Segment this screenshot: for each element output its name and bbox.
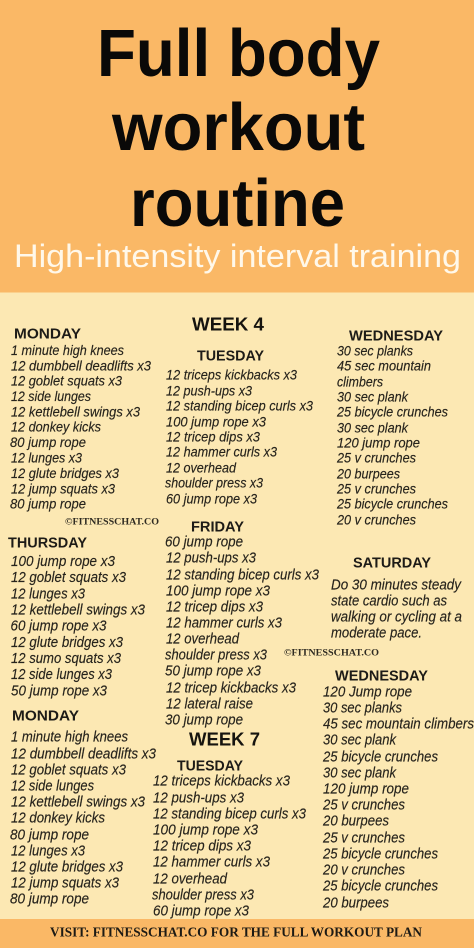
list: Tuesday week 7 exercises: 12 overhead — [153, 872, 228, 888]
heading: Friday: FRIDAY — [191, 520, 244, 536]
list: Wednesday week 7 exercises: 30 sec plank — [323, 732, 397, 748]
heading: Wednesday: WEDNESDAY — [349, 328, 443, 344]
text block: Saturday cardio: moderate pace. — [331, 626, 422, 642]
heading: Tuesday week 7: TUESDAY — [177, 758, 243, 774]
list: Monday exercises: 12 glute bridges x3 — [11, 466, 119, 481]
list: Wednesday week 7 exercises: 25 v crunches — [322, 798, 405, 814]
list: Friday exercises: 12 tricep dips x3 — [166, 600, 263, 616]
heading: Week 4: WEEK 4 — [192, 314, 264, 334]
list: Thursday exercises — [10, 554, 145, 700]
list: Tuesday week 7 exercises: 100 jump rope x3 — [153, 822, 258, 838]
list: Wednesday exercises: 25 v crunches — [336, 482, 416, 496]
list: Wednesday week 7 exercises: 20 burpees — [322, 814, 389, 830]
list: Monday week 7 exercises: 80 jump rope — [10, 892, 89, 908]
list: Tuesday week 7 exercises: 12 push-ups x3 — [153, 790, 244, 806]
list: Monday week 7 exercises: 12 kettlebell swings x3 — [11, 794, 145, 810]
title: workout — [111, 90, 365, 165]
list: Monday exercises: 12 dumbbell deadlifts x3 — [11, 358, 151, 374]
list: Friday exercises: 100 jump rope x3 — [166, 584, 270, 600]
list: Wednesday week 7 exercises: 25 v crunches — [322, 830, 405, 846]
list: Thursday exercises: 12 kettlebell swings x3 — [11, 602, 145, 618]
list: Wednesday week 7 exercises: 25 bicycle crunches — [322, 750, 438, 766]
heading: Wednesday week 7: WEDNESDAY — [335, 668, 428, 684]
list: Friday exercises: 50 jump rope x3 — [165, 664, 261, 680]
list: Thursday exercises: 12 lunges x3 — [11, 586, 85, 602]
list: Thursday exercises: 60 jump rope x3 — [10, 618, 106, 634]
text block: Saturday cardio — [331, 578, 462, 642]
list: Wednesday week 7 exercises — [322, 684, 474, 912]
list: Wednesday exercises: 45 sec mountain — [337, 358, 431, 374]
list: Wednesday exercises: 120 jump rope — [337, 436, 420, 450]
heading: Week 7: WEEK 7 — [189, 730, 260, 750]
list: Monday exercises — [10, 343, 151, 512]
watermark: ©FITNESSCHAT.CO — [284, 648, 379, 658]
list: Tuesday week 7 exercises — [152, 774, 306, 920]
list: Monday exercises: 12 donkey kicks — [11, 420, 101, 434]
footer text: VISIT: FITNESSCHAT.CO FOR THE FULL WORKOUT PLAN — [50, 924, 422, 940]
list: Thursday exercises: 12 side lunges x3 — [11, 667, 112, 683]
list: Thursday exercises: 50 jump rope x3 — [11, 684, 107, 700]
list: Tuesday week 7 exercises: 12 standing bicep curls x3 — [153, 806, 306, 822]
list: Thursday exercises: 12 glute bridges x3 — [11, 635, 123, 651]
list: Wednesday week 7 exercises: 25 bicycle crunches — [322, 846, 438, 862]
list: Monday week 7 exercises: 12 lunges x3 — [11, 844, 85, 860]
list: Friday exercises: 60 jump rope — [165, 534, 243, 550]
list: Thursday exercises: 100 jump rope x3 — [11, 554, 115, 570]
list: Tuesday week 7 exercises: 12 tricep dips x3 — [153, 838, 251, 854]
list: Wednesday week 7 exercises: 30 sec planks — [323, 700, 402, 716]
list: Monday exercises: 12 kettlebell swings x3 — [11, 404, 140, 420]
subtitle: High-intensity interval training — [14, 238, 461, 274]
list: Wednesday week 7 exercises: 20 burpees — [322, 896, 389, 912]
list: Tuesday week 7 exercises: shoulder press x3 — [152, 888, 254, 904]
list: Tuesday exercises: 12 standing bicep curls x3 — [166, 398, 313, 414]
list: Wednesday exercises: 25 bicycle crunches — [336, 496, 448, 512]
list: Monday week 7 exercises — [10, 730, 156, 908]
list: Monday week 7 exercises: 12 jump squats x3 — [11, 876, 119, 892]
list: Friday exercises: 12 lateral raise — [166, 696, 253, 712]
panel: right column — [284, 328, 474, 912]
list: Friday exercises: 12 overhead — [166, 632, 240, 648]
list: Wednesday exercises: 20 v crunches — [336, 512, 416, 528]
list: Tuesday exercises: 12 hammer curls x3 — [166, 444, 277, 460]
panel: left column — [8, 326, 159, 908]
list: Tuesday exercises: 12 push-ups x3 — [166, 384, 252, 398]
heading: Monday week 7: MONDAY — [12, 708, 79, 724]
title: routine — [130, 166, 345, 241]
list: Friday exercises — [165, 534, 319, 728]
list: Wednesday week 7 exercises: 120 Jump rope — [323, 684, 412, 700]
list: Wednesday week 7 exercises: 120 jump rope — [323, 782, 409, 798]
text block: Saturday cardio: walking or cycling at a — [331, 610, 462, 626]
list: Monday exercises: 80 jump rope — [10, 435, 86, 450]
list: Monday week 7 exercises: 80 jump rope — [10, 828, 89, 844]
heading: Monday: MONDAY — [14, 326, 81, 342]
panel: footer — [0, 919, 474, 948]
panel: middle column — [152, 314, 319, 920]
list: Monday week 7 exercises: 1 minute high knees — [11, 730, 128, 746]
list: Friday exercises: 30 jump rope — [165, 712, 243, 728]
text block: Saturday cardio: Do 30 minutes steady — [331, 578, 462, 594]
panel: header — [0, 0, 474, 292]
list: Wednesday week 7 exercises: 20 v crunches — [322, 862, 405, 878]
list: Monday week 7 exercises: 12 side lunges — [11, 778, 94, 794]
list: Monday week 7 exercises: 12 goblet squats x3 — [11, 762, 126, 778]
list: Monday week 7 exercises: 12 dumbbell deadlifts x3 — [11, 746, 156, 762]
list: Friday exercises: 12 tricep kickbacks x3 — [166, 680, 296, 696]
list: Friday exercises: shoulder press x3 — [165, 648, 267, 664]
list: Wednesday exercises: 25 v crunches — [336, 450, 416, 466]
list: Monday week 7 exercises: 12 glute bridges x3 — [11, 860, 123, 876]
list: Tuesday week 7 exercises: 60 jump rope x3 — [153, 904, 249, 920]
list: Wednesday exercises: 30 sec planks — [337, 344, 413, 358]
list: Monday week 7 exercises: 12 donkey kicks — [11, 810, 105, 826]
list: Tuesday week 7 exercises: 12 hammer curls x3 — [153, 854, 270, 870]
list: Thursday exercises: 12 goblet squats x3 — [11, 570, 126, 586]
heading: Thursday: THURSDAY — [8, 536, 87, 552]
list: Wednesday exercises: 25 bicycle crunches — [336, 404, 448, 420]
text block: Saturday cardio: state cardio such as — [331, 594, 447, 610]
list: Friday exercises: 12 push-ups x3 — [166, 550, 256, 566]
list: Wednesday week 7 exercises: 30 sec plank — [323, 766, 397, 782]
list: Wednesday week 7 exercises: 25 bicycle crunches — [322, 878, 438, 894]
list: Friday exercises: 12 standing bicep curls x3 — [166, 568, 319, 584]
list: Tuesday exercises — [165, 368, 313, 506]
heading: Tuesday: TUESDAY — [197, 348, 264, 364]
list: Friday exercises: 12 hammer curls x3 — [166, 616, 282, 632]
list: Monday exercises: 12 goblet squats x3 — [11, 374, 122, 388]
list: Wednesday exercises: 30 sec plank — [337, 420, 409, 436]
list: Tuesday exercises: 12 tricep dips x3 — [166, 430, 260, 444]
watermark: ©FITNESSCHAT.CO — [65, 516, 159, 528]
list: Wednesday exercises: 30 sec plank — [337, 390, 409, 404]
list: Tuesday exercises: 60 jump rope x3 — [166, 492, 257, 506]
list: Wednesday exercises: climbers — [337, 374, 383, 390]
title: Full body — [97, 16, 380, 91]
list: Tuesday week 7 exercises: 12 triceps kickbacks x3 — [153, 774, 290, 790]
list: Monday exercises: 12 side lunges — [11, 389, 91, 404]
list: Tuesday exercises: 12 triceps kickbacks x3 — [166, 368, 297, 382]
list: Monday exercises: 80 jump rope — [10, 496, 86, 512]
list: Tuesday exercises: shoulder press x3 — [165, 476, 263, 490]
list: Monday exercises: 1 minute high knees — [11, 343, 124, 358]
title — [97, 16, 380, 241]
list: Tuesday exercises: 12 overhead — [166, 460, 236, 476]
list: Thursday exercises: 12 sumo squats x3 — [11, 651, 121, 667]
list: Wednesday exercises: 20 burpees — [336, 466, 400, 482]
list: Monday exercises: 12 lunges x3 — [11, 450, 82, 466]
list: Monday exercises: 12 jump squats x3 — [11, 482, 115, 496]
heading: Saturday: SATURDAY — [353, 556, 431, 572]
list: Wednesday exercises — [336, 344, 448, 528]
list: Tuesday exercises: 100 jump rope x3 — [166, 414, 266, 430]
